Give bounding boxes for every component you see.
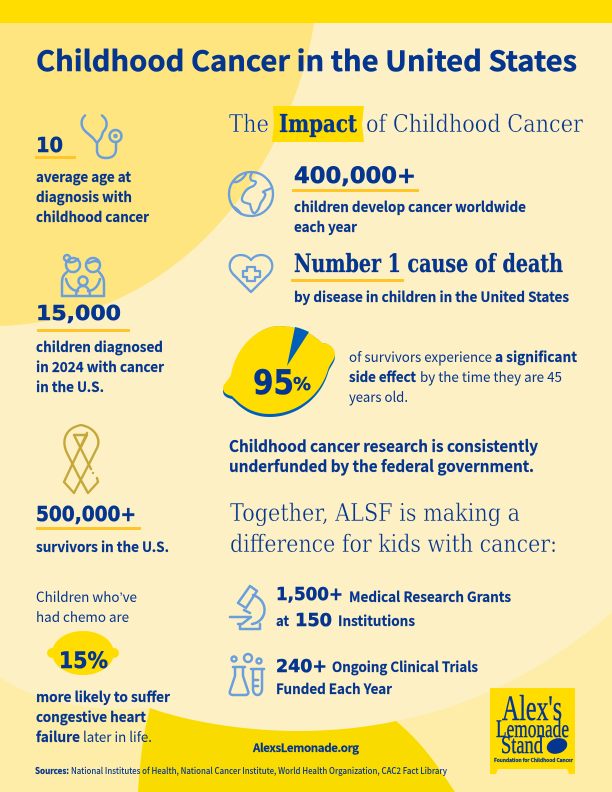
text: grants: at: [276, 611, 289, 631]
heading: the impact: Impact: [279, 109, 357, 138]
description: heart failure: more likely to suffer: [36, 687, 171, 707]
title: Childhood Cancer in the United States: [36, 40, 577, 80]
callout: underfunded: [229, 433, 538, 477]
stat: children diagnosed: [36, 255, 165, 397]
logo: Alex's Lemonade Stand: Lemonade: [496, 716, 569, 743]
description: by disease: by disease in children in the United States: [294, 287, 569, 307]
text: grants: Institutions: [338, 611, 415, 631]
stat: survivors: [36, 425, 169, 557]
number: 10: 10: [36, 133, 63, 157]
intro text: had chemo are: [36, 607, 129, 627]
intro text: Children who’ve: [36, 587, 137, 607]
number: 400,000+: 400,000+: [294, 164, 416, 189]
description: children diagnosed: in 2024 with cancer: [36, 357, 165, 377]
description: worldwide: children develop cancer worldwide: [294, 197, 526, 217]
description: average age: childhood cancer: [36, 207, 150, 227]
callout: underfunded: underfunded by the federal government.: [229, 453, 534, 477]
description: survivors side effect: [349, 347, 577, 407]
logo: Alex's Lemonade Stand: Alex's: [502, 688, 562, 728]
icon: ribbon: [64, 425, 98, 493]
description: average age: [36, 167, 150, 227]
heading: the impact: [229, 106, 583, 142]
description: survivors side effect: by the time they are 45: [420, 367, 562, 387]
description: children diagnosed: in the U.S.: [36, 377, 104, 397]
description: children diagnosed: children diagnosed: [36, 337, 163, 357]
icon: flask and test tube: [230, 654, 264, 695]
description: survivors side effect: a significant: [495, 347, 577, 367]
logo: Alex's Lemonade Stand: Foundation for Childhood Cancer: [494, 757, 574, 764]
stat: worldwide: [229, 164, 526, 237]
lemon chart: 95%: %: [293, 374, 311, 395]
text: trials: Ongoing Clinical Trials: [332, 657, 478, 677]
text: trials: 240+: [276, 656, 327, 677]
description: average age: diagnosis with: [36, 187, 132, 207]
description: heart failure: failure: [36, 727, 80, 747]
text: grants: 150: [295, 610, 332, 631]
description: heart failure: later in life.: [83, 727, 152, 747]
text: trials: Funded Each Year: [276, 679, 393, 699]
heading: the impact: of Childhood Cancer: [366, 110, 583, 138]
icon: stethoscope: [82, 116, 122, 158]
description: survivors side effect: years old.: [349, 387, 408, 407]
description: worldwide: [294, 197, 526, 237]
description: worldwide: each year: [294, 217, 358, 237]
stat: number 1 cause: [230, 249, 569, 307]
heading: together: [230, 499, 557, 558]
heading: the impact: The: [229, 110, 269, 138]
lemon chart: 95%: 95: [253, 363, 294, 403]
sources: Sources:: [35, 764, 69, 777]
text: trials: [276, 656, 478, 699]
number: 15,000: 15,000: [36, 301, 121, 325]
stat: congestive heart failure: [36, 587, 171, 747]
icon: globe: [229, 172, 273, 216]
icon: heart with cross: [230, 255, 272, 292]
description: heart failure: congestive heart: [36, 707, 146, 727]
description: survivors side effect: of survivors experience: [349, 347, 492, 367]
description: children diagnosed: [36, 337, 165, 397]
heading: together: difference for kids with cancer:: [230, 530, 557, 558]
text: grants: [276, 584, 511, 631]
number: 500,000+: 500,000+: [36, 502, 136, 526]
description: average age: average age at: [36, 167, 131, 187]
text: grants: 1,500+: [276, 584, 343, 605]
description: survivors side effect: side effect: [349, 367, 416, 387]
stat: clinical trials: [230, 654, 478, 699]
lemon badge: 15%: [47, 631, 119, 675]
intro text: [36, 587, 137, 627]
logo: Alex's Lemonade Stand: [490, 688, 575, 774]
description: heart failure: [36, 687, 171, 747]
sources: National Institutes of Health, National Cancer Institute, World Health Organization, CAC2 Fact Library: [71, 764, 447, 777]
text: grants: Medical Research Grants: [349, 587, 511, 607]
callout: underfunded: Childhood cancer research is consistently: [229, 433, 538, 457]
icon: family: [62, 255, 104, 296]
stat: 95 percent lemon pie: [223, 326, 577, 417]
website: AlexsLemonade.org: [252, 740, 359, 756]
icon: microscope: [230, 586, 265, 629]
stat: average age: [35, 116, 150, 227]
lemon chart: 95%: [223, 326, 335, 417]
heading: together: Together, ALSF is making a: [230, 499, 520, 527]
stat: research grants: [230, 584, 511, 631]
logo: Alex's Lemonade Stand: Stand: [501, 732, 543, 759]
description: survivors: survivors in the U.S.: [36, 537, 169, 557]
lemon badge: 15%: 15%: [59, 649, 108, 674]
